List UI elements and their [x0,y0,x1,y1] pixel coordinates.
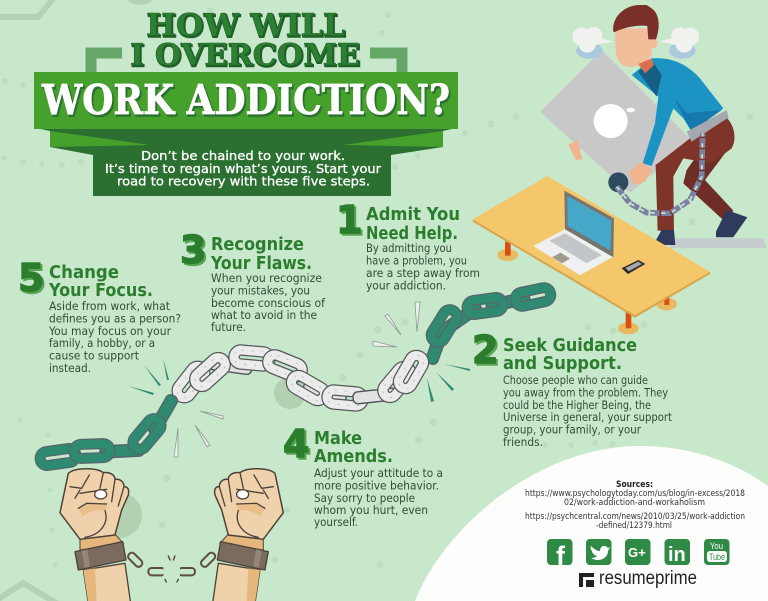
icon: facebook [547,539,572,571]
heading: Make [314,429,362,449]
subtitle: road to recovery with these five steps. [117,174,370,188]
torso [632,58,723,166]
body: you away from the problem. They [503,386,668,400]
number 5: 5 [18,256,44,300]
icon: facebook: f [556,541,566,571]
ground strip [670,238,767,248]
number 5: 5 [20,258,46,302]
sources: https://www.psychologytoday.com/us/blog/in-excess/2018 [525,489,745,499]
footer panel [415,446,768,601]
number 4: 4 [285,424,311,468]
right fist with cuff and chain [172,469,283,601]
body: become conscious of [211,296,326,310]
body [48,299,181,375]
front leg and hips [656,118,734,231]
icon: google plus [625,539,650,565]
body: group, your family, or your [503,422,641,436]
title: i overcome: I OVERCOME [130,38,360,73]
heading [314,429,393,467]
body [211,271,326,334]
heading: Your Flaws. [210,254,312,274]
decorative hexagon outlines [0,0,58,601]
body: more positive behavior. [314,478,439,492]
title: work addiction: WORK ADDICTION? [43,78,451,126]
heading [210,235,312,274]
body: have a problem, you [366,254,467,268]
body: whom you hurt, even [314,503,428,517]
icon: youtube: You [710,541,723,551]
body [366,241,480,292]
body: When you recognize [211,271,322,285]
title: how will: HOW WILL [147,9,346,45]
number 2: 2 [472,328,498,372]
left fist with cuff and chain [60,469,172,601]
body: your mistakes, you [211,284,310,298]
step 1: admit you need help [336,198,480,292]
title: work addiction: WORK ADDICTION? [41,76,450,124]
title brackets [91,53,402,75]
shoes [653,210,747,245]
number 2: 2 [474,330,500,374]
broken chain: middle gray segment [174,349,426,407]
number 1: 1 [336,198,362,242]
desk legs [497,249,518,261]
body [503,373,672,449]
heading: Seek Guidance [503,336,637,356]
hands [568,140,652,185]
icon: google plus: G+ [628,545,646,560]
sources: 02/work-addiction-and-workaholism [564,498,705,508]
resumeprime logo: resumeprime [599,568,697,589]
steam clouds [573,27,699,59]
giant laptop lid [543,53,688,190]
number 3: 3 [182,230,208,274]
ribbon fold [36,128,456,196]
main banner [34,72,458,129]
step 5: change your focus [18,256,181,375]
body: are a step away from [366,266,480,280]
sources [525,480,745,531]
step 4: make amends [283,422,443,529]
body [314,466,443,529]
heading: Amends. [314,447,393,467]
phone [622,260,645,274]
heading: Recognize [211,235,304,255]
sources: Sources: [616,480,653,490]
body: future. [211,320,246,334]
heading: Admit You [366,205,460,225]
heading: Change [49,263,119,283]
desk [473,176,710,334]
ball and chain [608,133,703,213]
sources: https://psychcentral.com/news/2010/03/25/work-addiction [525,512,745,522]
body: Choose people who can guide [503,373,648,387]
sources: -defined/12379.html [596,521,672,531]
heading [366,205,460,244]
title: i overcome: I OVERCOME [131,40,361,74]
number 3: 3 [180,228,206,272]
icon: youtube: Tube [709,552,725,562]
face and hair [613,5,659,67]
body: could be the Higher Being, the [503,398,651,412]
icon: linkedin: in [668,544,686,566]
break sparks [128,302,470,457]
subtitle [105,148,382,188]
illustration: man chained to laptop at desk [473,5,767,334]
body: instead. [49,361,91,375]
heading [503,336,637,374]
heading: Your Focus. [48,281,153,301]
body: friends. [503,435,543,449]
broken chain: right teal segment [425,286,552,366]
body: You may focus on your [48,324,171,338]
body: family, a hobby, or a [49,336,155,350]
body: Adjust your attitude to a [314,466,443,480]
heading: and Support. [503,354,622,374]
body: yourself. [314,515,358,529]
back leg [683,147,733,222]
laptop on desk [533,191,614,275]
body: Say sorry to people [314,491,415,505]
body: Aside from work, what [49,299,170,313]
belt [687,110,729,142]
title: how will: HOW WILL [146,8,345,44]
title block [34,8,458,196]
subtitle: Don’t be chained to your work. [141,148,345,163]
body: what to avoid in the [211,308,317,322]
body: By admitting you [366,241,452,255]
heading: Need Help. [366,224,458,244]
subtitle: It’s time to regain what’s yours. Start your [105,161,382,176]
body: Universe in general, your support [503,410,672,424]
body: cause to support [49,348,139,362]
broken chain: left teal segment [39,393,179,466]
step 3: recognize your flaws [180,228,326,334]
heading [48,263,153,301]
icon: twitter [586,539,612,565]
body: defines you as a person? [49,312,181,326]
number 4: 4 [283,422,309,466]
number 1: 1 [338,200,364,244]
icon: linkedin [664,539,690,566]
body: your addiction. [366,278,446,292]
step 2: seek guidance and support [472,328,672,449]
icon: youtube [704,539,730,565]
